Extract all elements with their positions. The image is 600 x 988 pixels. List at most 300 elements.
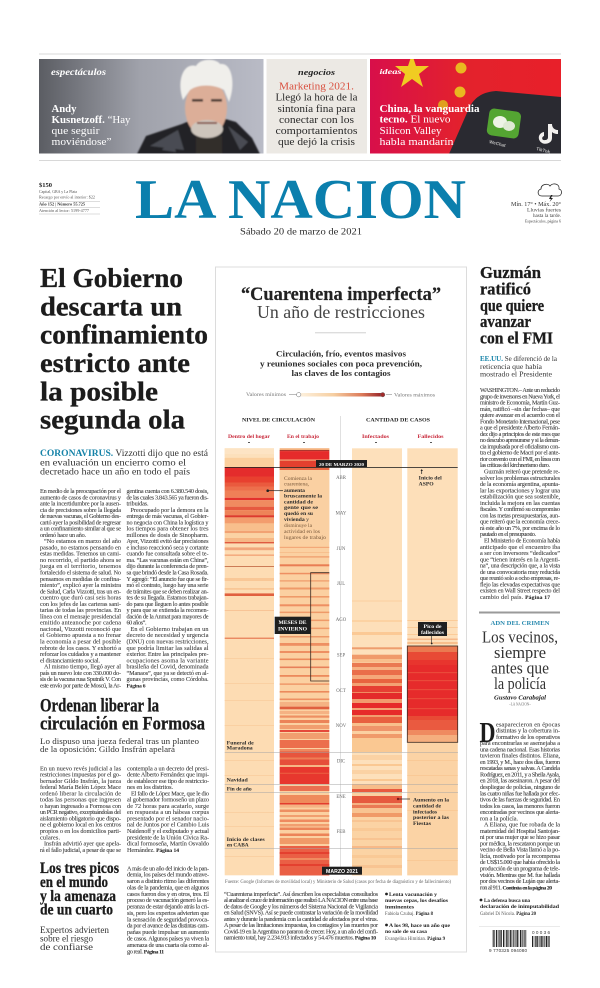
related story bullets: no sale de su casa: [385, 929, 427, 935]
subhead: Guzmán: EE.UU. Se diferenció de la: [480, 354, 558, 363]
section tag: ideas: [380, 67, 402, 76]
annotation: inicio del ASPO: ASPO: [419, 481, 434, 487]
Formosa story body, column 1: [40, 765, 122, 854]
main story body, column 1: con los jefes de las carteras sani-: [40, 601, 121, 608]
month axis: SEP: [337, 654, 345, 658]
annotation: cuarentena: cantidad de: [284, 500, 314, 506]
weather text: hasta la tarde.: [533, 213, 561, 219]
headline: los vecinos: antes que: [491, 658, 549, 678]
masthead logo: LA NACION: [135, 169, 466, 231]
main story body, column 1: juega en el territorio, tenemos: [39, 563, 122, 570]
infographic story text: en Salud (SNVS). Así se puede contrastar la variación de la movilidad: [224, 910, 379, 917]
main story body, column 1: país un nuevo lote con 330.000 do-: [40, 670, 121, 677]
annotation: aumento de infectados: Fiestas: [413, 821, 432, 827]
main story body, column 2: exterior. Entre las principales pre-: [126, 651, 208, 658]
main story body, column 1: a un confinamiento similar al que se: [40, 526, 121, 533]
teaser headline: Andy: [52, 104, 77, 115]
related story: la defensa: [480, 898, 560, 917]
main story body, column 1: el distanciamiento social.: [40, 657, 100, 664]
main story body, column 2: Página 6: [126, 683, 146, 689]
Formosa story body, column 1: culares.: [40, 834, 60, 841]
Formosa story body, column 1: federal María Belén López Mace: [40, 784, 121, 791]
annotation: cuarentena: quedó en su: [284, 511, 313, 517]
Guzmán story body: fiscales. Y confirmó su compromiso: [480, 506, 560, 513]
infographic intro: las claves de los contagios: [292, 369, 390, 378]
column story body: rescatadas sanas y salvas. A Candela: [480, 765, 560, 772]
Guzmán story body: Fondo Monetario Internacional, pese: [480, 418, 560, 425]
subhead: Guzmán: mostrado el Presidente: [480, 370, 553, 378]
month axis: MAY: [336, 512, 347, 516]
teaser headline: sintonía fina para: [278, 104, 356, 115]
main story body, column 1: cia de precisiones sobre la llegada: [40, 507, 121, 514]
main story body, column 2: millones de dosis de Sinopharm.: [126, 532, 209, 539]
photo: Andy Kusnetzoff: [137, 60, 260, 154]
main story body, column 2: Preocupado por la demora en la: [130, 507, 209, 514]
column labels: Infectados: [362, 434, 389, 440]
main story body, column 2: tribuidas.: [126, 500, 149, 508]
Guzmán story body: que reunió solo a ocho empresas, re-: [480, 575, 560, 582]
barcode: 9 770325 094080: [489, 948, 527, 953]
related story bullets: [385, 892, 451, 942]
month axis: OCT: [336, 689, 346, 694]
callout: pico de fallecidos: fallecidos: [421, 631, 444, 636]
tres picos story body: la sensación de seguridad provoca-: [127, 916, 209, 923]
Guzmán story body: na”, una descripción que, a la vista: [480, 563, 560, 570]
main story body, column 1: [39, 488, 122, 689]
infographic story text: [224, 891, 379, 942]
teaser headline: Llegó la hora de la: [276, 93, 358, 104]
teaser headline: Silicon Valley: [380, 126, 442, 137]
infographic story text: Covid-19 en la Argentina no pararon de crecer. Hoy, a un año del confi-: [224, 928, 378, 936]
infographic intro: [260, 350, 422, 378]
Formosa story body, column 2: de establecer ese tipo de restriccio-: [127, 778, 209, 785]
main headline: [40, 262, 208, 435]
headline: los vecinos: siempre: [494, 643, 546, 662]
headline: tres picos: y la amenaza: [40, 888, 116, 905]
headline: Formosa: circulación en Formosa: [40, 713, 205, 734]
tres picos story body: go real. Página 11: [127, 948, 164, 955]
Guzmán story body: de una convocatoria muy reducida: [480, 569, 560, 576]
column story body: esaparecieron en épocas: [496, 721, 561, 728]
Guzmán story body: Guzmán reiteró que pretende re-: [484, 468, 560, 476]
column story body: las cuatro niñas fue hallada por efec-: [480, 790, 560, 797]
related story bullets: inminentes: [385, 904, 415, 910]
main story body, column 2: (DNU) con nuevas restricciones,: [126, 638, 209, 646]
column story body: licía, motivado por la recompensa: [480, 853, 560, 860]
annotation: aumento de infectados: cantidad de: [413, 803, 442, 809]
main story body, column 2: de las cuales 3.843.565 ya fueron dis-: [126, 494, 208, 501]
main story body, column 1: rebrote de los casos. Y exhortó a: [40, 645, 121, 652]
Guzmán story body: tra el gobierno de Macri por el ante-: [480, 450, 560, 457]
tres picos story body: pañas puede impulsar un aumento: [127, 929, 209, 936]
heat column: infectados: [352, 448, 402, 876]
infographic title: “Cuarentena imperfecta”: [241, 284, 441, 305]
main subhead: en evaluación un encierro como el: [40, 458, 186, 468]
Guzmán story body: las críticas del kirchnerismo duro.: [480, 462, 550, 469]
tres picos story body: de casos. Algunos países ya viven la: [127, 936, 209, 942]
main story body, column 1: estas medidas. Tenemos un cami-: [40, 551, 121, 558]
infographic story text: al analizar el cruce de información que realizó LA NACION entre una base: [224, 897, 378, 904]
event labels: Funeral de: [227, 740, 254, 746]
main headline: segunda ola: [40, 404, 185, 435]
chart group heading: nivel de circulación: NIVEL DE CIRCULACIÓN: [242, 416, 315, 424]
Formosa story body, column 1: o hayan ingresado a Formosa con: [40, 803, 121, 810]
headline: los vecinos: Los vecinos,: [482, 628, 558, 646]
Guzmán story body: cia impulsada por el oficialismo con-: [480, 443, 560, 450]
headline: tres picos: Los tres picos: [40, 860, 119, 877]
headline: tres picos: [40, 860, 119, 918]
main story body, column 2: que podría limitar las salidas al: [126, 645, 209, 652]
Guzmán story body: a que el presidente Alberto Fernán-: [480, 425, 560, 432]
main subhead: CORONAVIRUS. Vizzotti dijo que no está: [40, 449, 209, 459]
teaser headline: que dejó la crisis: [278, 137, 355, 148]
tres picos story body: da por el avance de las distintas cam-: [127, 923, 209, 930]
tres picos story body: [127, 865, 210, 955]
Formosa story body, column 2: nal de Juntos por el Cambio Luis: [127, 822, 210, 829]
Guzmán story body: no descubo apresurarse y si la denun-: [480, 437, 560, 444]
callout: pico de fallecidos: [407, 622, 458, 742]
infographic intro: y reuniones sociales con poca prevención,: [260, 360, 422, 369]
main story body, column 1: de Salud, Carla Vizzotti, tras un en-: [40, 588, 121, 595]
main story body, column 1: fortalecido el sistema de salud. No: [40, 570, 121, 576]
weather text: Lluvias fuertes: [527, 206, 561, 214]
main story body, column 1: tarias de todas las provincias. En: [40, 607, 121, 614]
headline: tres picos: de un cuarto: [40, 902, 113, 918]
main story body, column 2: decreto de necesidad y urgencia: [126, 632, 209, 639]
Formosa story body, column 1: aislamiento obligatorio que dispo-: [40, 816, 121, 822]
Guzmán story body: anticipado que el encuentro iba: [480, 544, 560, 551]
column story body: [480, 721, 561, 891]
column story body: por dos vecinos de Luján que alerta-: [480, 878, 560, 885]
annotation: aumento de infectados: [397, 798, 450, 827]
column story body: vecino de Bella Vista llamó a la po-: [480, 847, 560, 854]
headline: Guzmán: [480, 263, 553, 348]
Guzmán story body: lar las exportaciones y lograr una: [480, 487, 560, 494]
headline: Guzmán: avanzar: [480, 312, 531, 331]
teaser headline: [52, 104, 131, 148]
column story body: en 1993, y M., hace dos días, fueron: [480, 759, 560, 766]
Guzmán story body: existen en Wall Street respecto del: [480, 588, 560, 595]
headline: Formosa: [40, 696, 205, 734]
related story: la defensa: La defensa busca una: [484, 898, 530, 904]
annotation: cuarentena: Comienza la: [284, 476, 313, 482]
event labels: Fin de año: [227, 786, 252, 792]
annotation: cuarentena: actividad en los: [284, 529, 320, 535]
tres picos story body: demia, los países del mundo atrave-: [127, 872, 209, 879]
month axis: ENE: [336, 795, 346, 800]
annotation: cuarentena: aumenta: [284, 488, 305, 494]
Formosa story body, column 1: rá el fallo judicial, a pesar de que se: [40, 847, 121, 854]
main story body, column 2: En el Gobierno trabajan en un: [130, 626, 208, 633]
Formosa story body, column 2: [127, 765, 210, 854]
main story body, column 1: reforzar los cuidados y a mantener: [40, 651, 121, 658]
Formosa story body, column 2: contempla a un decreto del presi-: [127, 765, 209, 772]
main story body, column 1: el Gobierno apuesta a no frenar: [40, 632, 121, 639]
headline: Guzmán: con el FMI: [480, 328, 553, 348]
subhead: tres picos: [40, 925, 109, 952]
subhead: Guzmán: reticencia que había: [480, 362, 543, 371]
annotation: aumento de infectados: infectados: [413, 809, 438, 815]
column story body: encontradas por vecinos que alerta-: [480, 809, 560, 816]
Formosa story body, column 2: dical formoseña, Martín Osvaldo: [127, 840, 209, 848]
infographic story text: antes y durante la pandemia con la cantidad de afectados por el virus.: [224, 916, 378, 923]
subhead: Guzmán: [480, 354, 558, 378]
heat column: dentro del hogar: [225, 448, 274, 875]
Guzmán story body: con las metas presupuestarias, aun-: [480, 512, 560, 519]
timeline start marker: 20 DE MARZO 2020: [319, 462, 365, 467]
icon: WeChat: [486, 108, 522, 139]
main story body, column 2: ocupaciones asoma la variante: [126, 657, 209, 664]
panel: negocios teaser: [266, 59, 367, 154]
Formosa story body, column 1: restricciones impuestas por el go-: [40, 772, 121, 779]
column labels: En el trabajo: [287, 434, 319, 440]
main story body, column 2: no negocia con China la logística y: [126, 519, 209, 526]
infographic story text: de datos de Google y los números del Sistema Nacional de Vigilancia: [224, 904, 378, 910]
main story body, column 2: ma. “Las vacunas están en China”,: [126, 557, 209, 564]
column story body: tivos de las fuerzas de seguridad. En: [480, 796, 560, 804]
column story body: formativo de los operativos: [496, 734, 561, 741]
teaser headline: comportamientos: [276, 126, 358, 137]
main story body, column 1: “No estamos en marzo del año: [44, 538, 121, 545]
arrow: cuarentena: [266, 489, 283, 492]
annotation: cuarentena: bruscamente la: [284, 494, 322, 500]
weather text: Mín. 17° • Máx. 20°: [511, 201, 562, 208]
masthead info: price and edition: $150: [39, 182, 52, 189]
Guzmán story body: cambio del país. Página 17: [480, 594, 550, 601]
column story body: ron a la policía.: [480, 815, 518, 822]
Guzmán story body: WASHINGTON.– Ante un reducido: [480, 387, 560, 394]
Guzmán story body: mán, ratificó –sin dar fechas– que: [480, 406, 560, 413]
teaser headline: [276, 82, 358, 148]
timeline end marker: MARZO 2021: [326, 869, 358, 875]
month axis: FEB: [337, 830, 345, 835]
tres picos story body: saron a distinto ritmo las diferentes: [127, 878, 210, 885]
Guzmán story body: solver los problemas estructurales: [480, 475, 561, 482]
tres picos story body: proceso de vacunación generó la es-: [127, 897, 209, 904]
Guzmán story body: El Ministerio de Economía había: [484, 538, 560, 544]
teaser headline: conectar con los: [279, 115, 354, 126]
main story body, column 2: entrega de más vacunas, el Gobier-: [126, 513, 208, 520]
related story bullets: Evangelina Himitian. Página 9: [385, 937, 445, 942]
column story body: ron al 911. Continúa en la página 20: [480, 884, 552, 891]
Guzmán story body: incluida la mejora en las cuentas: [480, 500, 561, 507]
timeline end marker: [322, 867, 362, 875]
month axis: JUN: [337, 547, 346, 552]
headline: tres picos: en el mundo: [40, 874, 108, 891]
Formosa story body, column 2: al gobernador formoseño un plazo: [127, 797, 209, 804]
section tag: negocios: [298, 68, 335, 77]
Formosa story body, column 2: El fallo de López Mace, que le dio: [131, 790, 209, 797]
subhead: Formosa: de la oposición: Gildo Insfrán apelará: [40, 744, 175, 754]
color legend: Valores máximos: [394, 394, 435, 398]
Formosa story body, column 2: dente Alberto Fernández que impi-: [127, 772, 209, 779]
teaser headline: tecno. El nuevo: [380, 115, 450, 126]
heat column: fallecidos: [407, 448, 458, 875]
chart source: Fuente: Google (Informes de movilidad local) y Ministerio de Salud (casos por fecha de diagnóstico y de fallecimiento): [225, 880, 451, 885]
photo: phone and Chinese flag: WeChat: [489, 139, 507, 148]
event labels: Inicio de clases: [227, 837, 266, 843]
main story body, column 2: do para que lleguen lo antes posible: [126, 601, 209, 608]
headline: los vecinos: [482, 628, 558, 693]
Guzmán story body: que “tienen interés en la Argenti-: [480, 556, 560, 563]
masthead info: price and edition: Año 152 | Número 55.725: [39, 202, 85, 206]
Guzmán story body: [480, 387, 561, 601]
byline: –LA NACION–: [508, 702, 531, 706]
main story body, column 1: ante la incertidumbre por la ausen-: [40, 500, 121, 508]
panel: espectáculos teaser: [39, 59, 264, 154]
section tag: espectáculos: [51, 67, 107, 77]
icon: TikTok: [539, 124, 558, 144]
column story body: A Eliana, que fue robada de la: [484, 822, 560, 829]
teaser headline: China, la vanguardia: [380, 104, 480, 115]
main story body, column 1: no recorrido, el partido ahora se: [40, 557, 121, 564]
annotation: cuarentena: vivienda y: [284, 517, 309, 523]
date: Sábado 20 de marzo de 2021: [240, 228, 362, 238]
main subhead: [40, 449, 209, 478]
subhead: Formosa: [40, 736, 199, 754]
tres picos story body: olas de la pandemia, que en algunos: [127, 884, 210, 891]
infographic story text: namiento total, hay 2.234.913 infectados y 54.476 muertos. Página 10: [224, 935, 376, 942]
infographic title: Un año de restricciones: [257, 302, 425, 322]
main story body, column 2: cuando fue consultada sobre el te-: [126, 551, 208, 558]
callout: pico de fallecidos: Pico de: [424, 625, 442, 630]
masthead info: price and edition: Recargo por envío al interior: $22: [39, 194, 95, 200]
teaser headline: Marketing 2021.: [279, 82, 354, 92]
month axis: [336, 476, 347, 835]
subhead: tres picos: sobre el riesgo: [40, 934, 94, 944]
main subhead: decretado hace un año en todo el país: [40, 468, 190, 478]
section tag: ADN del crimen: ADN DEL CRIMEN: [490, 620, 550, 627]
event labels: [227, 740, 266, 848]
main headline: confinamiento: [40, 319, 208, 350]
tres picos story body: A más de un año del inicio de la pan-: [127, 865, 209, 872]
masthead info: price and edition: Atención al lector: 5199-4777: [39, 208, 89, 213]
barcode: [489, 930, 550, 953]
Formosa story body, column 1: En un nuevo revés judicial a las: [40, 765, 122, 772]
byline: [494, 696, 546, 706]
column story body: distintas y la cobertura in-: [496, 728, 560, 735]
column story body: en 2018, las asesinaron. A pesar del: [480, 778, 560, 785]
main story body, column 1: miento”, explicó ayer la ministra: [40, 582, 121, 589]
Formosa story body, column 1: todas las personas que ingresen: [40, 797, 121, 804]
related story: la defensa: Gabriel Di Nicola. Página 20: [480, 912, 536, 917]
main story body, column 2: dijo durante la conferencia de pren-: [126, 563, 208, 570]
column story body: una cadena nacional. Esas historias: [480, 746, 561, 753]
Formosa story body, column 1: propios o en los domicilios parti-: [40, 828, 121, 835]
main story body, column 2: e incluso reaccionó seca y cortante: [126, 544, 209, 551]
main story body, column 1: pensamos en medidas de confina-: [40, 576, 121, 583]
main story body, column 2: [126, 488, 209, 689]
main story body, column 2: gunas provincias, como Córdoba.: [126, 676, 209, 683]
Guzmán story body: rá este año un 7%, por encima de lo: [480, 525, 560, 532]
main story body, column 1: la economía a pesar del posible: [40, 638, 121, 646]
main story body, column 1: nacional, Vizzotti reconoció que: [40, 626, 121, 633]
column labels: Fallecidos: [418, 434, 444, 440]
main story body, column 2: gentina cuenta con 6.380.540 dosis,: [126, 488, 209, 495]
main story body, column 2: dación de la Anmat para mayores de: [126, 613, 209, 620]
Guzmán story body: pautado en el presupuesto.: [480, 531, 536, 538]
Formosa story body, column 2: en respuesta a un hábeas corpus: [127, 809, 210, 816]
main story body, column 2: Y agregó: “El anuncio fue que se fir-: [126, 576, 208, 583]
Guzmán story body: quiere avanzar en el acuerdo con el: [480, 412, 560, 419]
column story body: de US$15.000 que había ofrecido la: [480, 859, 560, 866]
infographic intro: Circulación, frío, eventos masivos: [276, 350, 406, 359]
annotation: cuarentena: disminuye la: [284, 523, 312, 529]
weather text: Espectáculos, página 6: [525, 220, 561, 224]
tres picos story body: casos fueron dos y en otros, tres. El: [127, 891, 209, 898]
main story body, column 1: emitido anteanoche por cadena: [40, 620, 121, 627]
related story bullets: Fabiola Czubaj. Página 8: [385, 912, 433, 917]
teaser headline: Kusnetzoff. “Hay: [52, 115, 131, 126]
column story body: por médica, la rescataron porque un: [480, 840, 560, 847]
weather text: [511, 201, 562, 224]
event labels: Maradona: [227, 746, 253, 752]
main story body, column 1: Al mismo tiempo, llegó ayer al: [44, 664, 121, 671]
Guzmán story body: ministro de Economía, Martín Guz-: [480, 400, 560, 406]
infographic story text: A pesar de las limitaciones impuestas, los contagios y las muertes por: [224, 922, 378, 929]
weather box: [511, 184, 562, 224]
main story body, column 1: este envío por parte de Moscú, la Ar-: [40, 682, 121, 689]
column story body: Rodríguez, en 2011, y a Sheila Ayala,: [480, 772, 560, 778]
Formosa story body, column 1: ordenó liberar la circulación de: [40, 790, 121, 797]
main story body, column 2: de trámites que se deben realizar an-: [126, 588, 208, 595]
main headline: la posible: [40, 375, 158, 406]
Formosa story body, column 2: presentado por el senador nacio-: [127, 816, 209, 822]
column story body: para encontrarlas se asemejaba a: [480, 740, 560, 747]
subhead: tres picos: Expertos advierten: [40, 925, 109, 935]
annotation: cuarentena: cuarentena,: [284, 482, 310, 488]
headline: Guzmán: ratificó: [480, 280, 531, 298]
Formosa story body, column 1: ne el gobierno local en los centros: [40, 822, 122, 829]
annotation: inicio del ASPO: [419, 469, 442, 487]
main story body, column 1: En medio de la preocupación por el: [40, 488, 121, 495]
month axis: NOV: [336, 724, 347, 729]
drop cap: D: [480, 717, 496, 749]
Guzmán story body: dez dijo a principios de este mes que: [480, 431, 560, 438]
infographic story text: “Cuarentena imperfecta”. Así describen los especialistas consultados: [224, 891, 379, 898]
main story body, column 2: los tiempos para obtener los tres: [126, 526, 209, 533]
column labels: [228, 434, 444, 442]
color legend: [246, 392, 435, 398]
photo: phone and Chinese flag: TikTok: [536, 146, 551, 154]
main headline: estricto ante: [40, 347, 190, 378]
Formosa story body, column 2: Hernández. Página 14: [127, 847, 179, 854]
Formosa story body, column 2: Naidenoff y el exdiputado y actual: [127, 828, 209, 835]
event labels: en CABA: [227, 842, 249, 848]
main story body, column 1: pasado, no estamos pensando en: [40, 544, 121, 551]
Guzmán story body: que reiteró que la economía crece-: [480, 519, 560, 526]
Formosa story body, column 2: nes en los distritos.: [127, 784, 173, 791]
month axis: ABR: [336, 476, 347, 481]
masthead info: price and edition: [39, 182, 100, 214]
Guzmán story body: grupo de inversores en Nueva York, el: [480, 393, 560, 400]
column story body: maternidad del Hospital Santojan-: [480, 828, 560, 835]
main story body, column 1: línea con el mensaje presidencial: [40, 613, 121, 620]
main story body, column 1: sis de la vacuna rusa Sputnik V. Con: [40, 676, 121, 683]
heat column: en el trabajo: [280, 448, 329, 876]
column story body: producción de un programa de tele-: [480, 866, 560, 872]
color legend: Valores mínimos: [246, 393, 286, 398]
main story body, column 2: sa que brindó desde la Casa Rosada.: [126, 570, 209, 576]
annotation: cuarentena: lugares de trabajo: [284, 535, 326, 541]
Guzmán story body: estabilización que sea sostenible,: [480, 494, 560, 501]
main headline: descarta un: [40, 290, 182, 321]
main headline: El Gobierno: [40, 262, 183, 293]
main story body, column 2: Ayer, Vizzotti evitó dar precisiones: [126, 538, 209, 545]
barcode: 00036: [532, 930, 550, 935]
Guzmán story body: de la economía argentina, apunta-: [480, 481, 560, 488]
Formosa story body, column 1: Insfrán advirtió ayer que apela-: [44, 840, 121, 848]
